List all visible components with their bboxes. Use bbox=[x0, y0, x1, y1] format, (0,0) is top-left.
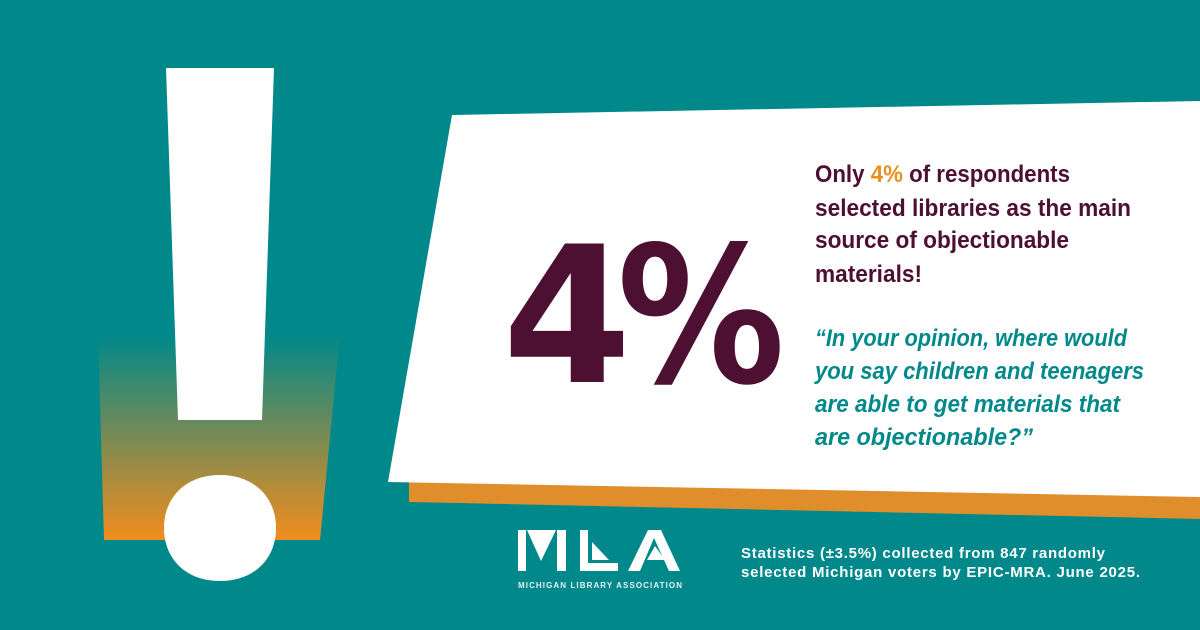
source note bbox=[741, 545, 1140, 581]
logo: Michigan Library Association bbox=[518, 530, 682, 590]
survey question quote: are objectionable?” bbox=[815, 424, 1033, 451]
heading text block: source of objectionable bbox=[815, 227, 1069, 254]
icon: exclamation mark with glow bbox=[98, 68, 340, 581]
big statistic 4%: % bbox=[617, 206, 785, 427]
heading text block: materials! bbox=[815, 261, 922, 288]
heading text block bbox=[815, 161, 1131, 288]
survey question quote: “In your opinion, where would bbox=[815, 325, 1128, 352]
survey question quote bbox=[814, 325, 1144, 451]
heading text block: Only 4% of respondents bbox=[815, 161, 1070, 188]
big statistic 4%: 4 bbox=[502, 206, 632, 427]
source note: Statistics (±3.5%) collected from 847 randomly bbox=[741, 545, 1106, 562]
panel: statistic card bbox=[388, 101, 1200, 519]
big statistic 4% bbox=[502, 206, 785, 427]
heading text block: selected libraries as the main bbox=[815, 195, 1131, 222]
logo: Michigan Library Association: MICHIGAN LIBRARY ASSOCIATION bbox=[518, 581, 682, 590]
survey question quote: you say children and teenagers bbox=[814, 358, 1144, 385]
survey question quote: are able to get materials that bbox=[815, 391, 1121, 418]
source note: selected Michigan voters by EPIC-MRA. June 2025. bbox=[741, 564, 1140, 581]
